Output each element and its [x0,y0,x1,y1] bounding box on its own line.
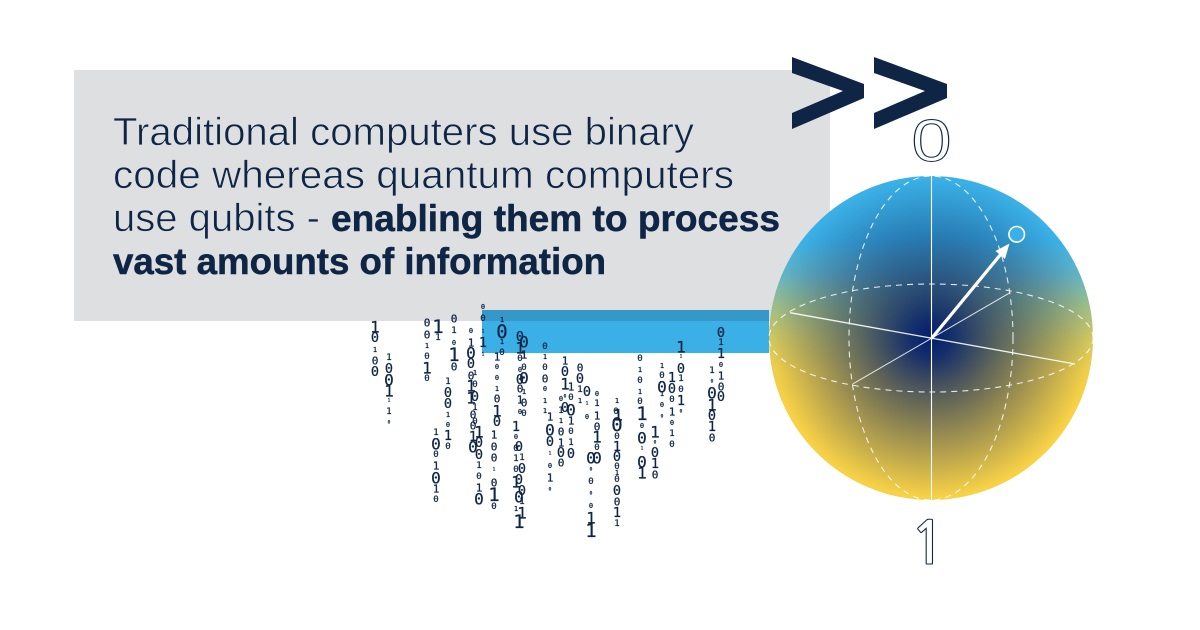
binary code rain: 0 [557,445,565,461]
binary code rain: 1 [491,428,497,442]
binary code rain: 0 [592,448,602,468]
binary code rain: 1 [718,370,724,382]
binary code rain: 1 [549,450,552,456]
binary code rain: 0 [585,413,589,421]
binary code rain: 1 [473,369,477,377]
binary code rain: 0 [515,439,523,455]
label: state 1: 1 [910,514,946,573]
binary code rain: 0 [546,434,554,450]
binary code rain: 0 [513,465,519,475]
binary code rain: 1 [482,352,485,358]
binary code rain: 0 [388,420,391,426]
binary code rain: 1 [513,454,519,464]
binary code rain: 1 [568,438,574,448]
binary code rain: 0 [637,376,643,386]
binary code rain: 1 [386,407,392,417]
binary code rain: 1 [718,338,724,348]
binary code rain: 0 [542,342,548,352]
blue bar [482,310,769,353]
binary code rain: 0 [451,312,457,326]
binary code rain: 0 [594,443,600,453]
binary code rain: 1 [543,397,547,405]
binary code rain: 0 [561,400,569,416]
binary code rain: 1 [615,397,619,405]
binary code rain: 0 [717,325,725,341]
binary code rain: 0 [451,360,457,374]
binary code rain: 0 [652,468,658,482]
binary code rain: 0 [496,321,508,343]
binary code rain: 1 [448,344,460,366]
binary code rain: 0 [476,472,482,482]
binary code rain: 0 [491,440,497,454]
binary code rain: 1 [469,429,477,445]
binary code rain: 1 [709,366,715,376]
binary code rain: 0 [678,385,684,395]
binary code rain: 0 [495,363,499,371]
binary code rain: 0 [519,368,529,388]
binary code rain: 0 [433,450,439,460]
binary code rain: 0 [677,361,685,377]
binary code rain: 0 [668,381,676,397]
binary code rain: 1 [446,411,450,419]
binary code rain: 0 [717,389,725,405]
binary code rain: 1 [547,472,553,484]
binary code rain: 0 [613,407,619,417]
binary code rain: 0 [519,332,529,352]
binary code rain: 1 [373,346,377,354]
binary code rain: 1 [669,406,675,418]
binary code rain: 1 [543,407,547,415]
binary code rain: 0 [670,419,674,427]
binary code rain: 0 [481,303,485,311]
binary code rain: 0 [491,452,497,464]
label: state 0: 0 [911,107,952,174]
binary code rain: 1 [435,333,441,343]
binary code rain: 0 [475,435,483,451]
binary code rain: 0 [518,461,526,477]
binary code rain: 0 [568,427,574,437]
binary code rain: 1 [638,366,642,374]
binary code rain: 1 [669,429,675,439]
binary code rain: 0 [637,452,647,472]
binary code rain: 0 [614,432,620,442]
binary code rain: 0 [499,348,505,358]
binary code rain: 0 [651,445,659,461]
binary code rain: 1 [613,406,623,424]
binary code rain: 1 [500,338,504,346]
binary code rain: 0 [718,380,724,394]
binary code rain: 0 [669,440,675,450]
binary code rain: 1 [422,358,432,378]
binary code rain: 0 [385,361,393,377]
binary code rain: 1 [615,469,619,477]
binary code rain: 1 [521,348,527,362]
binary code rain: 0 [583,384,591,400]
binary code rain: 1 [495,385,499,393]
binary code rain: 1 [519,497,525,507]
binary code rain: 1 [543,353,547,361]
binary code rain: 1 [433,428,439,438]
binary code rain: 0 [543,385,547,393]
binary code rain: 0 [444,385,452,401]
binary code rain: 0 [514,488,524,506]
binary code rain: 0 [467,356,475,372]
binary code rain: 1 [433,460,439,472]
binary code rain: 0 [424,374,430,384]
binary code rain: 0 [521,409,527,419]
heading text: use qubits - [113,197,320,240]
binary code rain: 1 [451,326,457,336]
binary code rain: 1 [614,519,620,529]
binary code rain: 0 [517,382,523,396]
binary code rain: 1 [651,456,659,472]
binary code rain: 0 [708,408,716,424]
binary code rain: 0 [542,372,548,386]
binary code rain: 0 [371,330,379,346]
binary code rain: 1 [592,428,602,446]
binary code rain: 1 [494,350,500,364]
binary code rain: 0 [613,449,621,465]
binary code rain: 1 [594,399,600,409]
binary code rain: 1 [586,508,596,528]
binary code rain: 0 [518,366,522,374]
binary code rain: 0 [493,414,501,430]
binary code rain: 1 [636,403,648,425]
binary code rain: 1 [370,318,380,336]
binary code rain: 1 [517,394,523,406]
binary code rain: 0 [661,414,664,420]
binary code rain: 0 [472,380,478,390]
binary code rain: 0 [480,314,486,324]
binary code rain: 0 [472,417,478,427]
binary code rain: 0 [470,420,476,432]
binary code rain [370,303,725,542]
binary code rain: 0 [445,442,451,452]
binary code rain: 1 [560,374,570,394]
binary code rain: 1 [678,374,684,384]
binary code rain: 0 [637,397,643,407]
binary code rain: 1 [650,422,660,442]
binary code rain: 0 [558,426,564,438]
binary code rain: 1 [578,397,582,405]
binary code rain: 0 [590,466,593,472]
binary code rain: 1 [512,419,520,435]
binary code rain: 1 [562,354,568,368]
binary code rain: 0 [611,414,623,436]
binary code rain: 0 [659,371,665,381]
binary code rain: 1 [468,336,474,350]
binary code rain: 0 [637,354,643,364]
binary code rain: 0 [566,400,576,420]
binary code rain: 0 [577,362,583,374]
binary code rain: 0 [424,328,430,342]
binary code rain: 0 [595,390,599,398]
binary code rain: 0 [491,502,497,512]
binary code rain: 0 [590,490,593,496]
binary code rain: 0 [452,339,456,347]
binary code rain: 1 [466,376,476,396]
binary code rain: 0 [475,447,483,463]
binary code rain: 1 [388,398,391,404]
binary code rain: 0 [614,475,620,485]
binary code rain: 1 [522,388,526,396]
binary code rain: 1 [668,370,676,386]
binary code rain: 0 [680,408,683,414]
binary code rain: 1 [513,511,525,533]
binary code rain: 1 [432,316,444,338]
binary code rain: 1 [425,342,429,350]
binary code rain: 1 [474,422,484,442]
binary code rain: 0 [474,490,484,508]
binary code rain: 0 [613,483,621,499]
binary code rain: 1 [677,393,685,409]
binary code rain: 0 [614,462,620,472]
binary code rain: 0 [521,396,527,410]
binary code rain: 0 [654,440,657,446]
binary code rain: 1 [547,410,553,424]
binary code rain: 1 [660,390,664,398]
binary code rain: 0 [516,372,524,388]
binary code rain: 1 [717,346,725,362]
binary code rain: 1 [384,382,394,400]
binary code rain: 0 [468,370,474,382]
binary code rain: 0 [469,327,473,335]
binary code rain: 0 [669,395,675,405]
binary code rain: 1 [517,504,527,522]
binary code rain: 0 [431,468,441,488]
binary code rain: 1 [466,388,476,408]
binary code rain: 0 [521,363,527,373]
binary code rain: 0 [515,472,523,488]
binary code rain: 0 [614,496,620,508]
binary code rain: 1 [707,396,717,414]
binary code rain: 1 [676,338,686,356]
Bloch sphere [769,176,1093,500]
binary code rain: 0 [594,420,600,434]
binary code rain: 1 [515,338,525,358]
binary code rain: 0 [640,422,644,430]
binary code rain: 1 [680,354,683,360]
binary code rain: 1 [500,316,504,324]
binary code rain: 1 [479,335,487,351]
binary code rain: 1 [641,446,644,452]
binary code rain: 0 [545,420,555,440]
binary code rain: 0 [637,428,647,448]
binary code rain: 0 [446,421,450,429]
binary code rain: 1 [586,400,589,406]
binary code rain: 1 [482,328,485,334]
binary code rain: 1 [558,436,564,450]
binary code rain: 0 [549,486,552,492]
binary code rain: 0 [548,462,552,470]
binary code rain: 0 [444,396,452,412]
binary code rain: 1 [559,417,563,425]
binary code rain: 1 [493,466,496,472]
binary code rain: 1 [577,385,583,395]
binary code rain: 1 [511,472,521,492]
binary code rain: 1 [708,419,716,435]
binary code rain: 0 [711,378,714,384]
binary code rain: 0 [568,393,574,403]
icon: double chevron [792,57,947,129]
binary code rain: 0 [564,394,567,400]
binary code rain: 0 [433,495,439,505]
binary code rain: 0 [542,363,548,373]
binary code rain: 0 [468,438,478,456]
binary code rain: 1 [476,482,482,494]
heading text [113,111,780,282]
binary code rain: 0 [471,389,479,405]
binary code rain: 1 [568,380,574,394]
binary code rain: 1 [613,505,621,521]
binary code rain: 0 [384,370,394,390]
binary code rain: 0 [424,316,430,330]
binary code rain: 0 [466,344,476,362]
binary code rain: 0 [491,476,497,490]
binary code rain: 0 [517,354,523,364]
binary code rain: 0 [431,434,441,454]
binary code rain: 1 [594,410,600,422]
binary code rain: 1 [585,520,597,542]
binary code rain: 0 [576,371,584,387]
binary code rain: 0 [516,329,524,345]
binary code rain: 1 [519,453,525,463]
binary code rain: 0 [513,444,519,454]
binary code rain: 0 [371,364,379,380]
binary code rain: 1 [514,505,518,513]
heading text: code whereas quantum computers [113,154,734,197]
binary code rain: 0 [424,352,430,362]
binary code rain: 1 [492,402,502,420]
heading text: Traditional computers use binary [113,111,695,154]
binary code rain: 0 [561,364,569,380]
binary code rain: 1 [386,353,392,363]
binary code rain: 0 [518,408,522,416]
binary code rain: 0 [709,432,715,444]
binary code rain: 0 [518,483,526,499]
binary code rain: 1 [476,461,482,471]
binary code rain: 0 [589,502,593,510]
binary code rain: 1 [472,403,478,413]
binary code rain: 1 [445,377,451,387]
panel: grey text background [74,70,830,321]
heading text: vast amounts of information [113,241,606,282]
binary code rain: 0 [588,477,594,487]
binary code rain: 1 [660,362,664,370]
binary code rain: 0 [660,401,664,409]
arrow: qubit state vector [932,244,1010,338]
binary code rain: 0 [495,374,499,382]
binary code rain: 1 [558,406,564,416]
binary code rain: 1 [488,484,500,506]
binary code rain: 1 [638,388,642,396]
binary code rain: 0 [514,433,518,441]
binary code rain: 1 [637,464,647,482]
binary code rain: 1 [433,482,439,496]
binary code rain: 0 [372,354,378,368]
binary code rain: 0 [559,395,563,403]
binary code rain: 0 [707,384,717,402]
binary code rain: 0 [470,408,476,422]
binary code rain: 0 [567,446,575,462]
binary code rain: 0 [586,448,596,468]
binary code rain: 0 [719,361,723,369]
binary code rain: 0 [657,378,667,396]
heading text: enabling them to process [331,198,780,239]
binary code rain: 0 [558,456,564,470]
qubit state marker [1009,226,1024,242]
binary code rain: 0 [494,392,500,406]
binary code rain: 1 [444,428,452,444]
binary code rain: 1 [613,439,621,455]
binary code rain: 1 [568,414,574,428]
